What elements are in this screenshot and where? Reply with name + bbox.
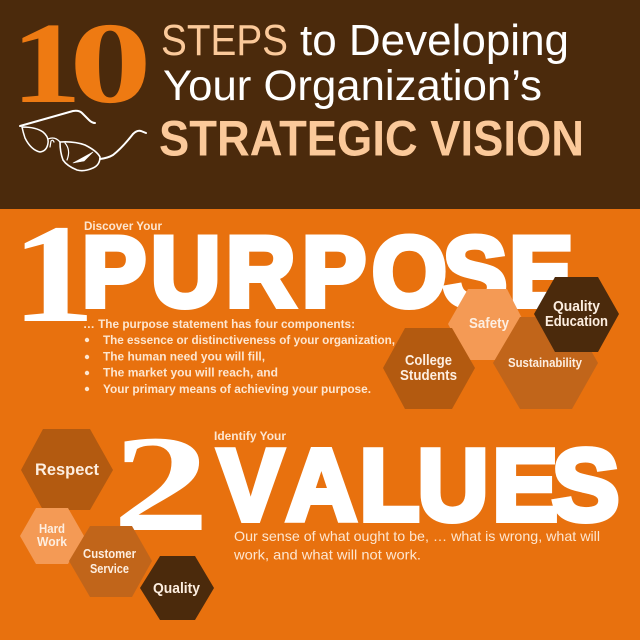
hexagon: Customer Service: Service <box>90 561 129 576</box>
hexagon: Safety: Safety <box>469 315 510 332</box>
hexagon: Quality: Quality <box>153 580 201 597</box>
section 2: values <box>20 407 619 620</box>
big number 1: 1 <box>11 195 96 352</box>
hexagon: Quality Education: Education <box>545 313 608 330</box>
hexagon: Hard Work <box>20 508 84 564</box>
hexagon: Respect <box>21 429 113 510</box>
hexagon: College Students: Students <box>400 367 457 384</box>
text block: purpose components: The essence or distinctiveness of your organization, <box>103 335 395 347</box>
text block: purpose components: Your primary means of achieving your purpose. <box>103 384 371 396</box>
hexagon: Customer Service <box>69 526 152 597</box>
hexagon: College Students: College <box>405 352 452 369</box>
hexagon: Quality Education: Quality <box>553 298 601 315</box>
label: Discover Your: Discover Your <box>84 221 163 233</box>
text block: purpose components <box>83 319 395 396</box>
title line 2: Your Organization’s <box>163 62 542 110</box>
text block: values description: work, and what will not work. <box>233 546 421 562</box>
hexagon: Hard Work: Hard <box>39 521 65 536</box>
title line 3: STRATEGIC VISION <box>159 110 584 166</box>
heading: PURPOSE: PURPOSE <box>82 217 573 327</box>
hexagon: Sustainability <box>493 317 598 409</box>
heading: VALUES: S <box>552 430 619 542</box>
section 1: purpose <box>11 195 619 409</box>
text block: values description <box>233 528 600 562</box>
icon: glasses <box>20 111 146 171</box>
big number 10: 0 <box>69 0 152 127</box>
heading: VALUES: VALUE <box>218 430 558 542</box>
text block: purpose components: … The purpose statement has four components: <box>83 319 355 331</box>
hexagon: Quality Education <box>534 277 619 352</box>
text block: values description: Our sense of what ought to be, … what is wrong, what will <box>234 528 600 544</box>
hexagon: Respect: Respect <box>35 460 99 479</box>
title line 1: STEPS <box>161 16 288 65</box>
panel: header <box>0 0 640 209</box>
hexagon: College Students <box>383 328 475 409</box>
hexagon: Customer Service: Customer <box>83 546 136 561</box>
hexagon: Safety <box>448 289 525 360</box>
text block: purpose components: The market you will reach, and <box>103 368 278 380</box>
panel: orange background <box>0 209 640 640</box>
title line 1: to Developing <box>300 16 569 65</box>
big number 10: 1 <box>11 0 82 127</box>
big number 2: 2 <box>112 407 210 560</box>
title line 1 <box>161 16 569 65</box>
hexagon: Quality <box>140 556 214 620</box>
hexagon: Sustainability: Sustainability <box>508 355 583 370</box>
big number 10 <box>11 0 152 127</box>
hexagon: Hard Work: Work <box>37 534 68 549</box>
label: Identify Your: Identify Your <box>214 431 287 443</box>
text block: purpose components: The human need you will fill, <box>103 352 265 364</box>
